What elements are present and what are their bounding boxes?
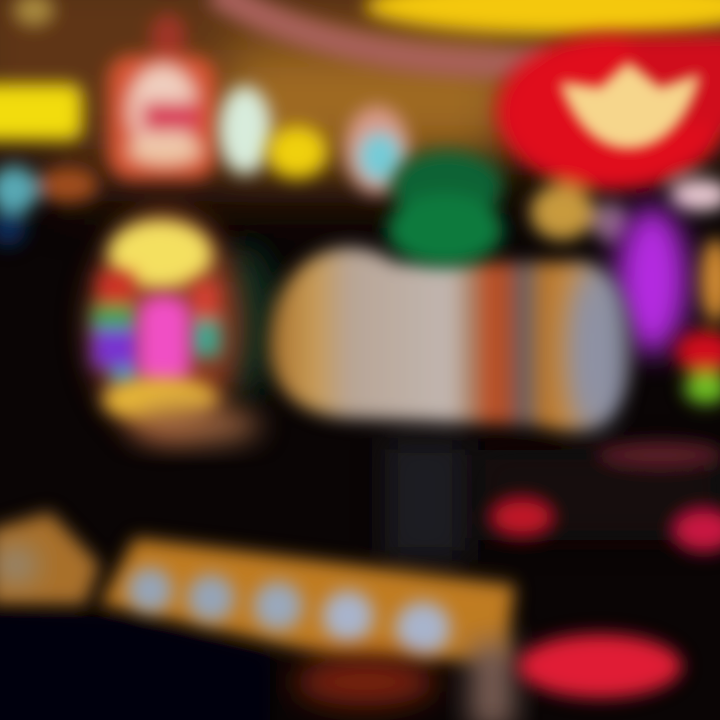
console front shadow xyxy=(0,612,270,720)
small yellow lamp xyxy=(267,126,327,178)
ceiling light xyxy=(365,0,720,34)
left yellow light band xyxy=(0,84,82,140)
lower red glow xyxy=(295,658,435,706)
wheel bottom yellow xyxy=(102,378,218,422)
machine floor tones xyxy=(385,440,720,560)
upper wall glow xyxy=(0,0,720,200)
wheel segments xyxy=(92,272,220,386)
wheel base xyxy=(130,407,260,443)
wheel glow xyxy=(89,213,241,437)
prize wheel xyxy=(89,213,260,443)
ceiling arc xyxy=(215,0,550,63)
barrel xyxy=(270,247,633,430)
purple glow xyxy=(616,206,688,354)
right side lamps xyxy=(675,238,720,404)
wheel pink centre xyxy=(138,296,190,386)
big red sign xyxy=(496,34,720,242)
wheel top yellow xyxy=(108,220,212,288)
barrel end cap xyxy=(568,276,616,428)
left console xyxy=(0,512,100,605)
console edge xyxy=(470,640,514,720)
red stool xyxy=(518,634,682,698)
right red lights xyxy=(490,441,720,552)
barrel body xyxy=(270,247,633,430)
sign crown emblem xyxy=(560,62,700,148)
small white lamp xyxy=(219,86,271,174)
main button console xyxy=(100,538,515,662)
green hat xyxy=(387,150,503,266)
dark green shadow xyxy=(211,245,279,395)
left blue light xyxy=(0,166,98,246)
left console button xyxy=(0,547,36,583)
slot machine sign xyxy=(108,14,216,180)
console buttons xyxy=(128,568,450,654)
cyan lamp xyxy=(345,106,409,194)
top left lamp xyxy=(14,0,54,26)
